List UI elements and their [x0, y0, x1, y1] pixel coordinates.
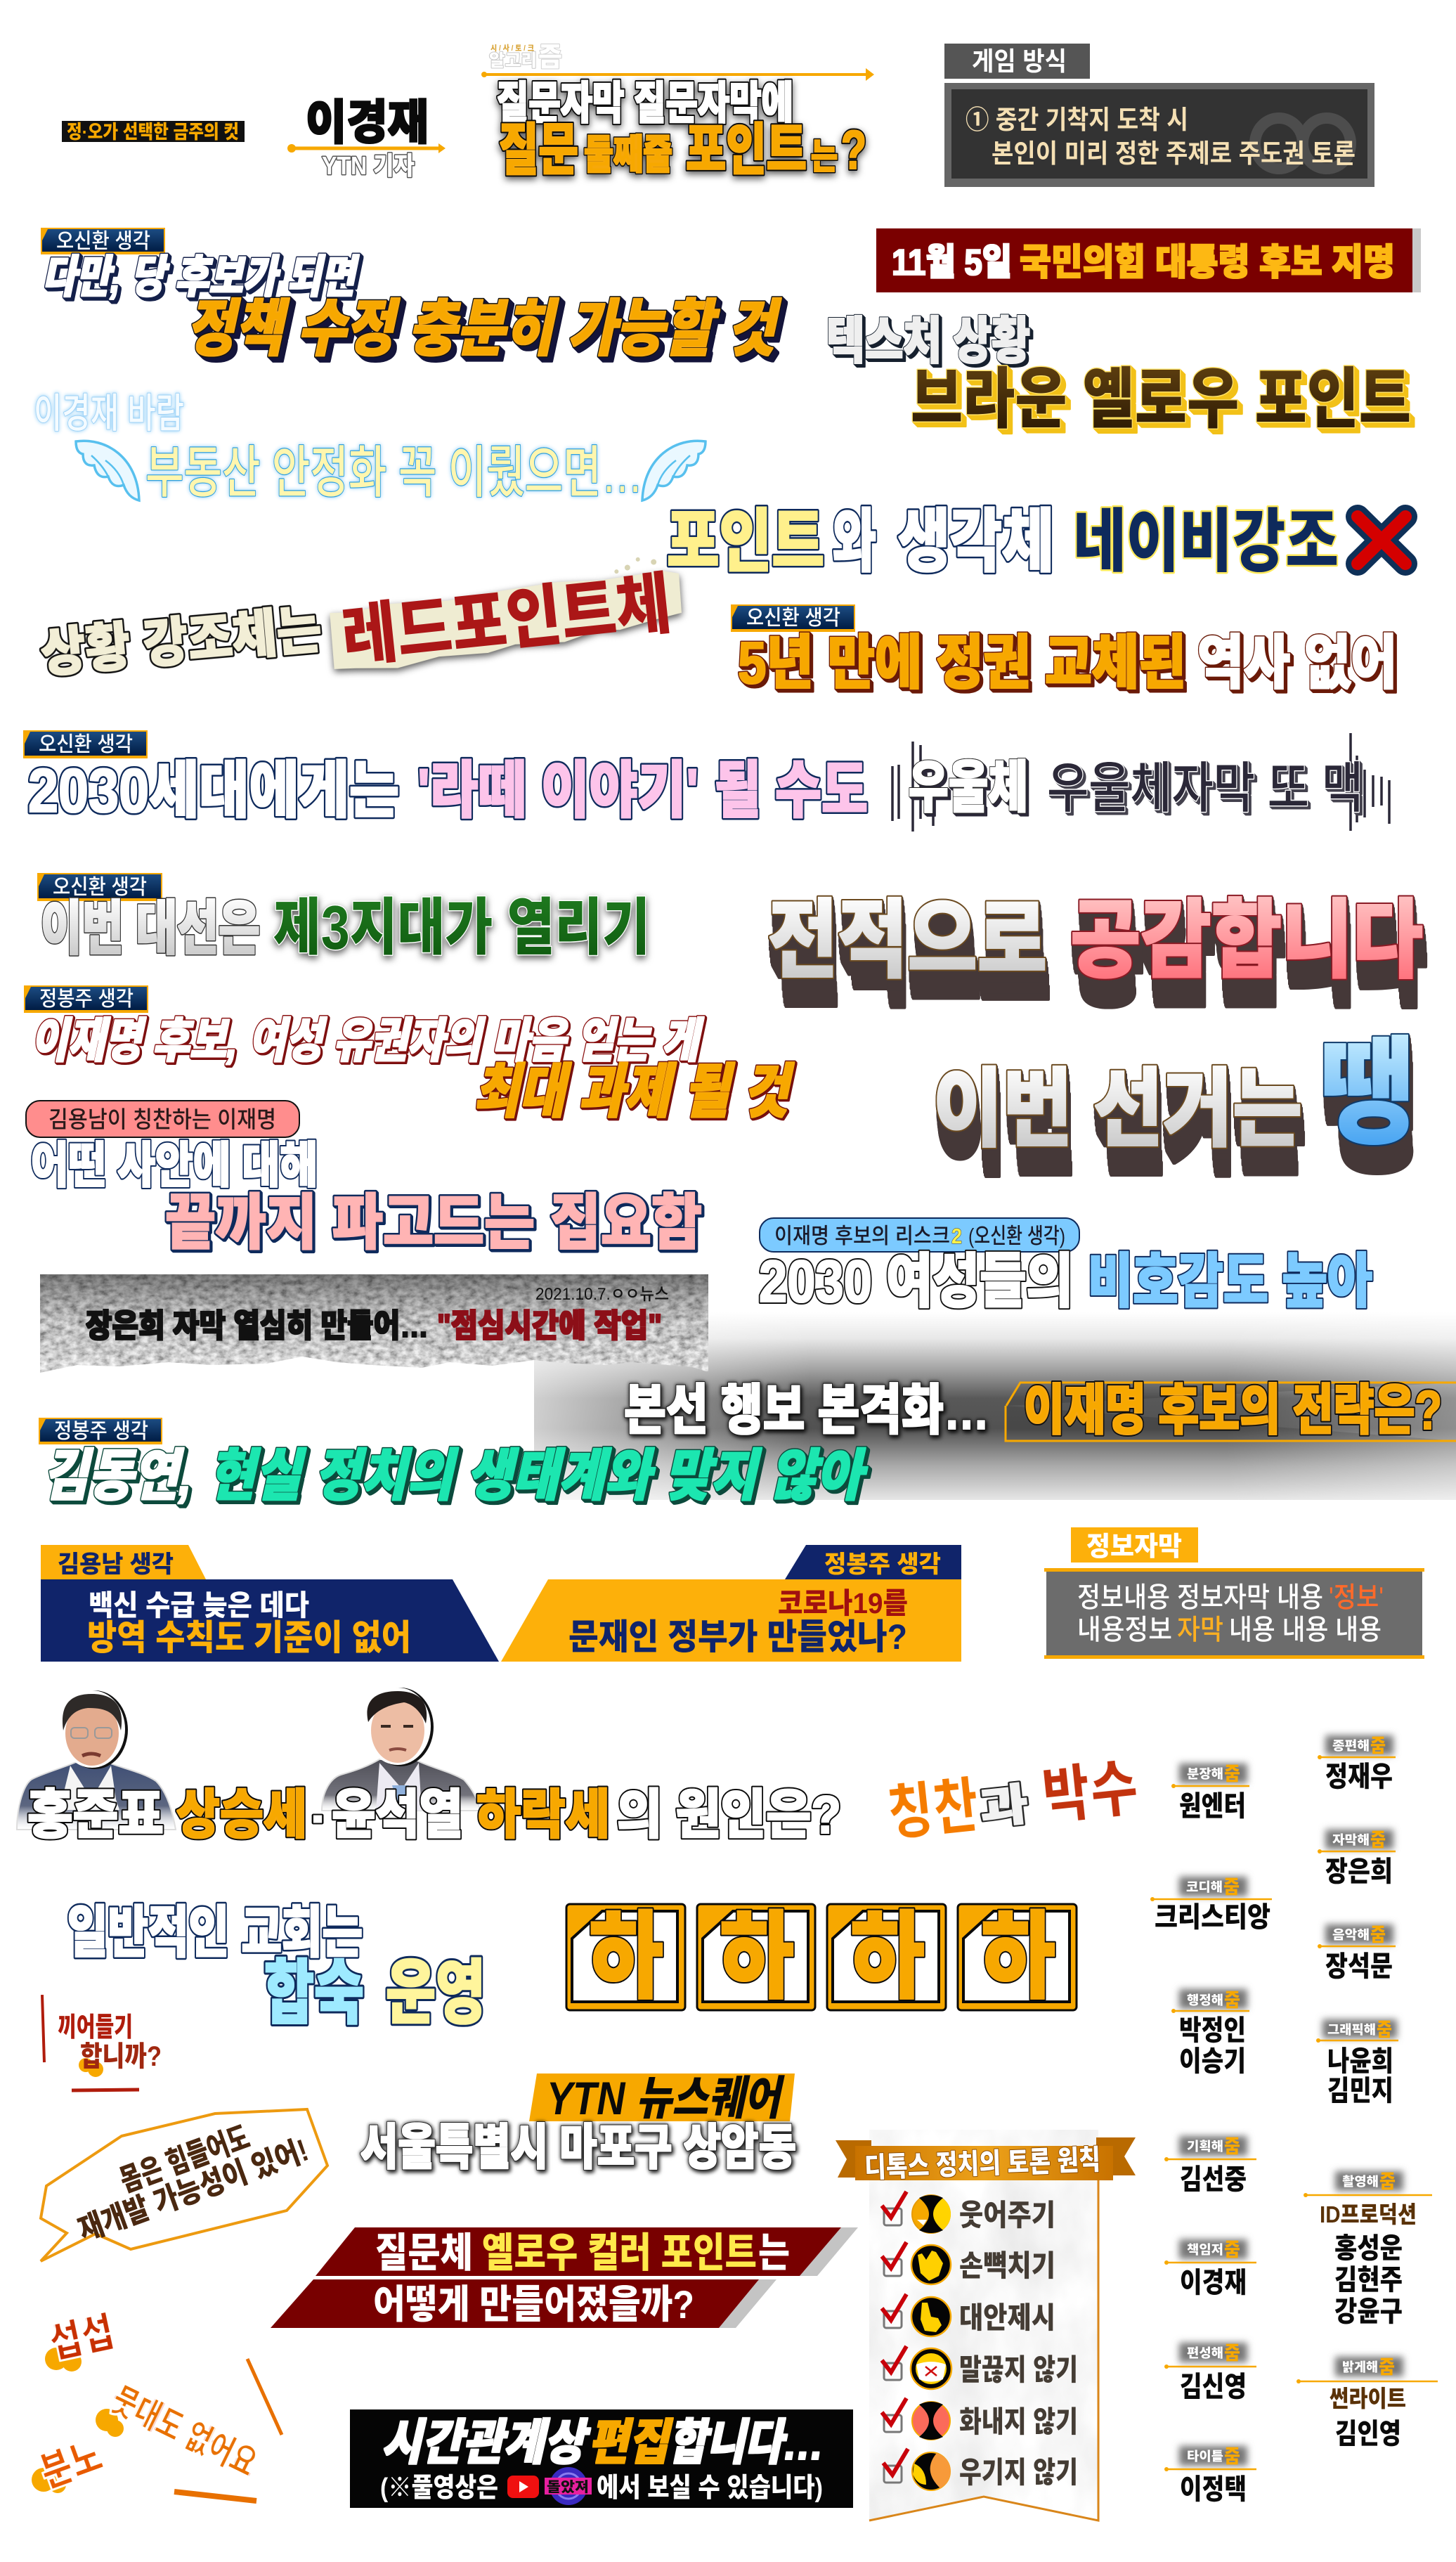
question caption with arrow — [481, 68, 874, 181]
ribbon: 디톡스 정치의 토론 원칙 — [864, 2144, 1101, 2184]
caption: 2030 여성들의 비호감도: 2030 여성들의 — [759, 1248, 1073, 1314]
pill: 리스크 2: 이재명 후보의 리스크 — [774, 1224, 950, 1248]
headline: 홍준표 상승세 윤석열 하락세: · — [311, 1795, 327, 1842]
caption: 2030세대 라떼 이야기 — [28, 756, 868, 825]
sound effect: 섭섭: 섭섭 — [46, 2309, 118, 2367]
3D caption: 전적으로 공감합니다 — [768, 893, 1423, 988]
panel: 편집 공지: 합니다… — [668, 2415, 824, 2470]
question caption with arrow: 포인트 — [686, 119, 807, 181]
credit: 음악해줌: 줌 — [1370, 1924, 1386, 1946]
credit: 그래픽해줌: 김민지 — [1327, 2076, 1393, 2107]
paper speckles — [613, 555, 657, 574]
caption: YTN 뉴스퀘어 위치: YTN 뉴스퀘어 — [547, 2072, 785, 2124]
3D caption: 이번 선거는 땡: 이번 선거는 — [933, 1061, 1302, 1157]
credit: 종편해줌: 정재우 — [1325, 1761, 1393, 1792]
3D caption: 전적으로 공감합니다: 공감합니다 — [1070, 893, 1423, 988]
panel: 정보자막 — [1044, 1527, 1424, 1659]
situation emphasis caption — [39, 553, 686, 682]
question caption with arrow: 둘째줄 — [584, 132, 672, 178]
item: 웃어주기: 웃어주기 — [959, 2199, 1055, 2232]
banner: 질문체 옐로우 컬러 포인트 — [271, 2227, 858, 2328]
credit: 종편해줌: 종편해 — [1332, 1739, 1370, 1753]
tag: 오신환 생각 — [37, 873, 162, 901]
headline: 홍준표 상승세 윤석열 하락세: 상승세 — [176, 1785, 307, 1845]
icon: red X — [1358, 517, 1405, 564]
wish caption with wings: 부동산 안정화 꼭 이뤘으면… — [145, 441, 643, 504]
credit: 코디해줌: 줌 — [1223, 1877, 1240, 1898]
caption: 끝까지 파고드는 집요함 — [31, 1138, 702, 1257]
credit: 행정해줌 — [1171, 1989, 1249, 2077]
credit: 분장해줌: 분장해 — [1187, 1767, 1223, 1781]
pill: 김용남이 칭찬하는 이재명: 김용남이 칭찬하는 이재명 — [48, 1106, 276, 1132]
headline: 홍준표 상승세 윤석열 하락세: 홍준표 — [27, 1785, 164, 1845]
wish caption with wings: 이경재 바람 — [34, 391, 184, 436]
tag: 오신환 생각: 오신환 생각 — [53, 876, 147, 899]
credit: 자막해줌: 줌 — [1370, 1830, 1386, 1851]
credit: 그래픽해줌 — [1316, 2019, 1398, 2107]
texture caption — [826, 313, 1411, 436]
credit: 책임저줌: 이경재 — [1180, 2267, 1247, 2298]
panel: 게임 방식 — [944, 44, 1374, 187]
credit: 촬영해줌: 홍성운 — [1334, 2233, 1403, 2264]
credit: 촬영해줌: 줌 — [1379, 2171, 1396, 2192]
item: 대안제시: 대안제시 — [959, 2301, 1055, 2334]
panel: 정봉주 생각: 정봉주 생각 — [824, 1551, 941, 1578]
caption: 제3지대: 제3지대가 열리기 — [273, 893, 650, 962]
credit: 종편해줌: 줌 — [1370, 1735, 1386, 1756]
credit: 촬영해줌 — [1304, 2171, 1432, 2327]
tag: 오신환 생각: 오신환 생각 — [39, 733, 133, 756]
caption: 제3지대 — [41, 893, 650, 962]
panel: 정봉주 생각 — [501, 1545, 961, 1662]
program logo: 알고리 — [489, 51, 537, 70]
item: 말끊지 않기: 말끊지 않기 — [959, 2353, 1078, 2386]
pill: 리스크 2: (오신환 생각) — [968, 1224, 1065, 1248]
situation emphasis caption: 상황 강조체는 — [39, 600, 324, 682]
tile 1: 하 — [589, 1903, 663, 2010]
program logo — [489, 43, 562, 72]
item: 손뼉치기 — [882, 2242, 1055, 2284]
credit: 책임저줌: 책임저 — [1187, 2243, 1223, 2257]
caption: 여성 유권자의 마음 — [31, 1014, 795, 1125]
3D caption: 이번 선거는 땡: 땡 — [1320, 1028, 1414, 1158]
credit: 타이틀줌 — [1164, 2446, 1256, 2505]
credit: 기획해줌: 김선중 — [1180, 2164, 1247, 2195]
credit: 밝게해줌: 썬라이트 — [1330, 2386, 1406, 2412]
waveform right — [1351, 733, 1389, 831]
speech bubble: 몸은 힘들어도 — [116, 2120, 254, 2199]
caption: 2030세대 라떼 이야기: 2030세대에게는 — [28, 756, 399, 825]
caption: 본선 행보 본격화: 본선 행보 본격화… — [624, 1379, 989, 1441]
panel: 편집 공지: (※풀영상은 — [380, 2473, 498, 2503]
credit: 분장해줌: 원엔터 — [1179, 1791, 1246, 1822]
credit: 종편해줌 — [1318, 1735, 1396, 1792]
speech bubble: 재개발 가능성이 있어! — [74, 2133, 313, 2248]
tag: 오신환 생각 — [23, 730, 148, 758]
panel: 편집 공지: 시간관계상 — [381, 2415, 591, 2470]
waveform left — [892, 742, 933, 832]
icon: right wing — [642, 441, 706, 500]
credit: 행정해줌: 박정인 — [1179, 2015, 1246, 2046]
tiles: 하 하 하 하 — [566, 1903, 1077, 2010]
banner: 질문체 옐로우 컬러 포인트: 옐로우 컬러 포인트 — [482, 2230, 757, 2276]
caption: 포인트와 생각체 네이비강조: 생각체 — [898, 503, 1054, 580]
credit: 타이틀줌: 타이틀 — [1187, 2450, 1223, 2464]
credit: 기획해줌: 기획해 — [1187, 2139, 1223, 2154]
caption: 2030 여성들의 비호감도 — [759, 1248, 1372, 1314]
gloomy caption with waveform: 우울체자막 또 맥 — [1047, 757, 1363, 819]
tag: 정봉주 생각: 정봉주 생각 — [39, 988, 134, 1011]
caption: YTN 뉴스퀘어 위치 — [360, 2072, 796, 2175]
label: 금주의 컷: 정·오가 선택한 금주의 컷 — [67, 122, 239, 143]
panel: 김용남 생각: 방역 수칙도 기준이 없어 — [87, 1618, 411, 1657]
tile 4: 하 — [981, 1903, 1055, 2010]
caption: 일반적인 교회는 합숙 운영: 일반적인 교회는 — [67, 1901, 363, 1964]
name caption: 이경재 YTN 기자 — [287, 96, 446, 180]
caption: 포인트와 생각체 네이비강조: 와 — [833, 503, 876, 580]
credit: 그래픽해줌: 그래픽해 — [1327, 2023, 1376, 2037]
note: 끼어들기 합니까?: 합니까? — [80, 2041, 162, 2072]
caption: 일반적인 교회는 합숙 운영: 운영 — [386, 1954, 486, 2033]
panel: news texture caption — [40, 1274, 708, 1373]
credit: 기획해줌 — [1164, 2136, 1256, 2195]
credit: 책임저줌: 줌 — [1224, 2239, 1240, 2260]
credit: 분장해줌 — [1171, 1764, 1249, 1822]
panel: 토론 원칙 ribbon banner — [836, 2130, 1136, 2521]
program logo: 시 / 사 / 토 / 크 — [490, 43, 534, 53]
question caption with arrow: ? — [841, 119, 866, 181]
wish caption with wings — [34, 391, 706, 504]
panel: 정보자막: 정보자막 — [1086, 1532, 1182, 1562]
credit: 그래픽해줌: 줌 — [1377, 2019, 1392, 2040]
sound effect: 분노: 분노 — [34, 2432, 108, 2497]
item: 화내지 않기 — [882, 2398, 1078, 2440]
panel: 게임 방식: ① 중간 기착지 도착 시 — [966, 105, 1188, 134]
program logo: 즘 — [538, 43, 562, 72]
credit: 편성해줌: 줌 — [1224, 2343, 1240, 2364]
pill: 리스크 2 — [760, 1218, 1079, 1252]
caption: 포인트와 생각체 네이비강조: 네이비강조 — [1073, 503, 1339, 580]
red point text on torn paper: 레드포인트체 — [339, 567, 675, 675]
panel: 정보자막: 자막 — [1177, 1615, 1223, 1645]
pill: 김용남이 칭찬하는 이재명 — [26, 1101, 299, 1137]
credit: 행정해줌: 줌 — [1224, 1990, 1240, 2011]
credit: 책임저줌 — [1164, 2239, 1256, 2298]
opinion caption: 다만 당 후보가 되면: 다만, 당 후보가 되면 — [42, 252, 360, 302]
icon: video play — [507, 2476, 539, 2498]
icon: channel badge — [545, 2467, 592, 2505]
tag: 정봉주 생각 — [24, 985, 148, 1013]
panel: news texture caption: 장은희 자막 열심히 만들어… — [86, 1307, 429, 1344]
sound effect: 뭇대도 없어요 — [96, 2359, 282, 2484]
credit: 음악해줌 — [1318, 1924, 1396, 1982]
headline: 홍준표 상승세 윤석열 하락세 — [27, 1785, 841, 1845]
caption: 여성 유권자의 마음: 최대 과제 될 것 — [474, 1059, 795, 1125]
credit: 타이틀줌: 줌 — [1224, 2446, 1240, 2467]
question caption with arrow: 질문자막 질문자막에 — [497, 78, 793, 129]
caption: 포인트와 생각체 네이비강조 — [667, 503, 1405, 580]
caption: 김동연 생태계: 김동연, — [43, 1444, 192, 1507]
item: 대안제시 — [882, 2294, 1055, 2336]
caption: 칭찬과 박수 — [884, 1752, 1141, 1848]
panel: news texture caption: "점심시간에 작업" — [437, 1307, 662, 1344]
item: 우기지 않기 — [883, 2449, 1078, 2490]
credit: 코디해줌 — [1150, 1877, 1272, 1933]
credit: 편성해줌: 김신영 — [1180, 2372, 1247, 2402]
3D caption: 전적으로 공감합니다: 전적으로 — [768, 893, 1047, 988]
panel: 정보자막: 내용정보 — [1077, 1615, 1172, 1645]
portrait: 홍준표 — [17, 1690, 176, 1830]
credit: 타이틀줌: 이정택 — [1180, 2474, 1247, 2505]
tile 3: 하 — [850, 1903, 925, 2010]
panel: 편집 공지: 편집 — [588, 2415, 674, 2470]
credit: 행정해줌: 이승기 — [1179, 2046, 1246, 2077]
credit: 촬영해줌: ID프로덕션 — [1320, 2201, 1417, 2227]
tile 2: 하 — [720, 1903, 794, 2010]
note: 끼어들기 합니까?: 끼어들기 — [58, 2013, 133, 2043]
banner: 11월 5일 대통령 후보 지명: 국민의힘 대통령 후보 지명 — [1020, 242, 1395, 283]
credit: 코디해줌: 코디해 — [1186, 1880, 1223, 1894]
question caption with arrow: 질문 — [499, 119, 578, 181]
tag: 오신환 생각: 오신환 생각 — [56, 230, 150, 253]
banner: 질문체 옐로우 컬러 포인트: 어떻게 만들어졌을까? — [373, 2282, 694, 2327]
name caption: 이경재 YTN 기자: YTN 기자 — [322, 151, 415, 180]
caption: 5년 만에 정권 교체된 역사 없어: 역사 없어 — [1197, 630, 1397, 696]
panel: 정보자막: 정보내용 정보자막 내용 — [1077, 1582, 1323, 1613]
credit: 행정해줌: 행정해 — [1187, 1993, 1223, 2007]
item: 말끊지 않기 — [882, 2346, 1078, 2389]
caption: 2030세대 라떼 이야기: 될 수도 — [715, 756, 868, 825]
caption: 2030 여성들의 비호감도: 비호감도 높아 — [1088, 1248, 1372, 1314]
panel: 편집 공지: 에서 보실 수 있습니다) — [597, 2473, 823, 2503]
item: 웃어주기 — [882, 2192, 1055, 2233]
caption: 포인트와 생각체 네이비강조: 포인트 — [667, 503, 824, 580]
icon: channel badge: 돌았져 — [547, 2479, 589, 2495]
banner: 질문체 옐로우 컬러 포인트: 질문체 — [375, 2230, 473, 2276]
caption: 일반적인 교회는 합숙 운영: 합숙 — [264, 1954, 364, 2033]
credit: 자막해줌 — [1318, 1830, 1396, 1887]
credit: 밝게해줌: 밝게해 — [1342, 2360, 1378, 2374]
tag: 오신환 생각: 오신환 생각 — [746, 607, 840, 630]
sound effect: 분노 — [32, 2432, 256, 2501]
3D caption: 이번 선거는 땡 — [933, 1028, 1414, 1158]
caption: 칭찬과 박수: 과 — [978, 1780, 1030, 1834]
panel: news texture caption: 2021.10.7.ㅇㅇ뉴스 — [535, 1285, 669, 1304]
headline: 홍준표 상승세 윤석열 하락세: 하락세 — [476, 1785, 610, 1845]
credit: 그래픽해줌: 나윤희 — [1327, 2046, 1393, 2077]
credit: 밝게해줌: 줌 — [1379, 2357, 1395, 2378]
credit: 편성해줌: 편성해 — [1187, 2346, 1223, 2360]
pill: 리스크 2: 2 — [951, 1224, 962, 1248]
opinion caption: 다만 당 후보가 되면: 정책 수정 충분히 가능할 것 — [186, 294, 781, 363]
caption: 제3지대: 이번 대선은 — [41, 895, 260, 962]
panel: 게임 방식: 게임 방식 — [972, 47, 1067, 76]
caption: 2030세대 라떼 이야기: '라떼 이야기' — [417, 756, 698, 825]
gloomy caption with waveform — [892, 733, 1389, 832]
credit: 밝게해줌: 김인영 — [1335, 2419, 1401, 2450]
caption: 끝까지 파고드는 집요함: 어떤 사안에 대해 — [31, 1138, 318, 1193]
dark gradient backdrop — [534, 1312, 1456, 1500]
note: 끼어들기 합니까? — [42, 1995, 162, 2090]
credits: right column — [1296, 1735, 1438, 2450]
credit: 자막해줌: 자막해 — [1332, 1833, 1370, 1847]
caption: 일반적인 교회는 합숙 운영 — [67, 1901, 486, 2033]
banner: 11월 5일 대통령 후보 지명: 11월 5일 — [892, 242, 1012, 283]
panel: 편집 공지 — [350, 2409, 853, 2508]
item: 화내지 않기: 화내지 않기 — [959, 2405, 1078, 2438]
item: 손뼉치기: 손뼉치기 — [959, 2249, 1055, 2282]
item: 우기지 않기: 우기지 않기 — [959, 2456, 1078, 2489]
panel: 정보자막: '정보' — [1329, 1582, 1384, 1613]
credit: 밝게해줌 — [1296, 2357, 1438, 2450]
name caption: 이경재 YTN 기자: 이경재 — [306, 96, 429, 150]
panel: 게임 방식: 본인이 미리 정한 주제로 주도권 토론 — [992, 139, 1356, 168]
caption: 김동연 생태계: 현실 정치의 생태계와 맞지 않아 — [209, 1444, 868, 1507]
sound effect: 뭇대도 없어요: 뭇대도 없어요 — [105, 2380, 263, 2484]
headline: 홍준표 상승세 윤석열 하락세: 의 원인은? — [617, 1785, 841, 1845]
portrait: 윤석열 — [322, 1688, 480, 1811]
credit: 코디해줌: 크리스티앙 — [1155, 1902, 1270, 1933]
banner: 질문체 옐로우 컬러 포인트: 는 — [758, 2230, 790, 2276]
credit: 음악해줌: 음악해 — [1332, 1928, 1370, 1942]
opinion caption: 다만 당 후보가 되면 — [42, 252, 781, 363]
caption: 칭찬과 박수: 칭찬 — [884, 1771, 982, 1848]
caption: 칭찬과 박수: 박수 — [1039, 1752, 1141, 1832]
credit: 음악해줌: 장석문 — [1325, 1951, 1393, 1982]
tag: 정봉주 생각: 정봉주 생각 — [54, 1420, 148, 1443]
credit: 기획해줌: 줌 — [1224, 2136, 1240, 2157]
credits: left column — [1150, 1764, 1272, 2505]
credit: 촬영해줌: 강윤구 — [1334, 2296, 1403, 2327]
banner: 11월 5일 대통령 후보 지명 — [876, 228, 1421, 292]
panel: 김용남 생각: 김용남 생각 — [58, 1551, 174, 1578]
credit: 분장해줌: 줌 — [1224, 1764, 1240, 1785]
headline: 홍준표 상승세 윤석열 하락세: 윤석열 — [332, 1785, 463, 1845]
gloomy caption with waveform: 우울체 — [909, 756, 1028, 819]
panel: 정봉주 생각: 문재인 정부가 만들었나? — [568, 1617, 907, 1657]
panel: 김용남 생각: 백신 수급 늦은 데다 — [89, 1589, 309, 1622]
panel: 정보자막: 내용 내용 내용 — [1229, 1615, 1382, 1645]
panel: 김용남 생각 — [41, 1545, 499, 1662]
caption: 여성 유권자의 마음: 이재명 후보, 여성 유권자의 마음 얻는 게 — [31, 1014, 705, 1068]
caption: 끝까지 파고드는 집요함: 끝까지 파고드는 집요함 — [165, 1189, 702, 1257]
panel: 정봉주 생각: 코로나19를 — [778, 1587, 908, 1619]
credit: 편성해줌 — [1164, 2343, 1256, 2402]
credit: 촬영해줌: 김현주 — [1334, 2265, 1403, 2296]
texture caption: 텍스처 상황 — [826, 313, 1030, 370]
question caption with arrow: 는 — [811, 137, 838, 176]
icon: left wing — [76, 441, 139, 500]
caption: 5년 만에 정권 교체된 역사 없어: 5년 만에 정권 교체된 — [738, 630, 1186, 696]
tag: 오신환 생각 — [731, 604, 855, 632]
credit: 자막해줌: 장은희 — [1325, 1856, 1393, 1887]
credit: 촬영해줌: 촬영해 — [1342, 2175, 1379, 2189]
caption: YTN 뉴스퀘어 위치: 서울특별시 마포구 상암동 — [360, 2120, 796, 2175]
